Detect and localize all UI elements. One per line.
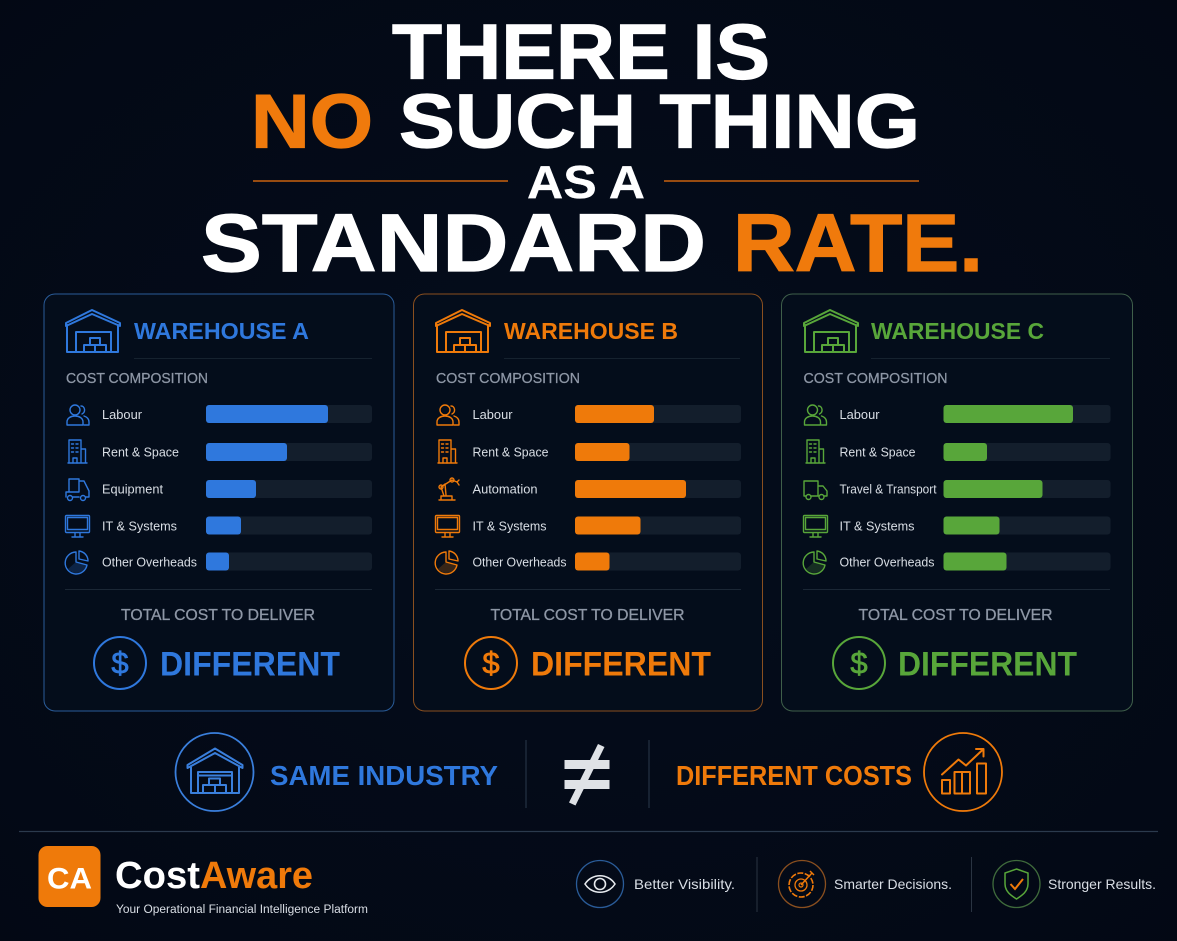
total cost label: TOTAL COST TO DELIVER (121, 607, 315, 624)
icon: not equal sign (564, 744, 610, 806)
title: THERE IS (392, 8, 770, 96)
row: other overheads (435, 551, 741, 574)
title: AS A (527, 156, 645, 208)
label: different costs: DIFFERENT COSTS (676, 760, 912, 791)
row: labour: Labour (102, 408, 142, 422)
panel: warehouse B (414, 294, 762, 711)
benefit: stronger results (993, 860, 1156, 908)
icon: dollar circle (465, 637, 517, 689)
benefit: stronger results: Stronger Results. (1048, 876, 1156, 892)
brand name: Cost (115, 855, 200, 897)
icon: dollar circle: $ (850, 646, 868, 680)
tagline: Your Operational Financial Intelligence Platform (116, 904, 368, 916)
heading: warehouse B: WAREHOUSE B (504, 318, 678, 344)
benefit: smarter decisions (778, 860, 952, 908)
benefit: better visibility: Better Visibility. (634, 876, 735, 892)
subheading: cost composition: COST COMPOSITION (804, 371, 948, 387)
row: IT and systems: IT & Systems (472, 520, 546, 534)
icon: warehouse A (66, 310, 120, 352)
title: NO (251, 80, 373, 164)
row: IT and systems (66, 516, 372, 537)
result: different: DIFFERENT (898, 646, 1077, 684)
benefit: smarter decisions: Smarter Decisions. (834, 876, 952, 892)
result: different: DIFFERENT (531, 646, 711, 684)
brand name (115, 855, 313, 897)
panel: warehouse A (44, 294, 394, 711)
row: equipment: Equipment (102, 482, 164, 496)
total cost label: TOTAL COST TO DELIVER (858, 607, 1052, 624)
brand logo: CA (47, 862, 92, 896)
row: automation: Automation (472, 482, 538, 496)
benefit: better visibility (576, 860, 735, 908)
row: rent and space (68, 440, 372, 463)
icon: dollar circle: $ (482, 646, 500, 680)
row: IT and systems: IT & Systems (840, 520, 914, 534)
title (201, 8, 983, 289)
row: other overheads (803, 551, 1110, 574)
row: labour: Labour (840, 408, 880, 422)
row: rent and space: Rent & Space (472, 446, 549, 460)
row: travel and transport (804, 480, 1110, 500)
row: labour: Labour (472, 408, 512, 422)
title: STANDARD (201, 198, 706, 289)
heading: warehouse A: WAREHOUSE A (134, 318, 309, 344)
subheading: cost composition: COST COMPOSITION (436, 371, 580, 387)
row: equipment (66, 479, 372, 500)
row: labour (67, 405, 372, 425)
row: rent and space (806, 440, 1110, 463)
subheading: cost composition: COST COMPOSITION (66, 371, 208, 387)
icon: dollar circle: $ (111, 646, 129, 680)
title: RATE. (733, 198, 983, 289)
row: IT and systems (436, 516, 741, 537)
total cost label: TOTAL COST TO DELIVER (490, 607, 684, 624)
panel: warehouse C (782, 294, 1132, 711)
row: other overheads (65, 551, 372, 574)
icon: warehouse B (436, 310, 490, 352)
label: same industry: SAME INDUSTRY (270, 760, 498, 791)
icon: rising cost chart (924, 733, 1002, 811)
row: travel and transport: Travel & Transport (840, 482, 937, 496)
row: other overheads: Other Overheads (840, 556, 934, 570)
icon: same industry warehouse (176, 733, 254, 811)
row: IT and systems: IT & Systems (102, 520, 177, 534)
icon: dollar circle (833, 637, 885, 689)
row: IT and systems (804, 516, 1110, 537)
icon: warehouse C (804, 310, 858, 352)
brand name: Aware (200, 855, 313, 897)
comparison strip (176, 733, 1002, 811)
result: different: DIFFERENT (160, 646, 340, 684)
row: automation (439, 478, 741, 500)
icon: dollar circle (94, 637, 146, 689)
heading: warehouse C: WAREHOUSE C (871, 318, 1044, 344)
row: labour (804, 405, 1110, 425)
title: SUCH THING (399, 80, 920, 164)
row: rent and space (438, 440, 741, 463)
brand logo (38, 846, 100, 907)
row: other overheads: Other Overheads (102, 556, 197, 570)
row: rent and space: Rent & Space (840, 446, 916, 460)
row: rent and space: Rent & Space (102, 446, 179, 460)
row: other overheads: Other Overheads (472, 556, 566, 570)
row: labour (437, 405, 741, 425)
